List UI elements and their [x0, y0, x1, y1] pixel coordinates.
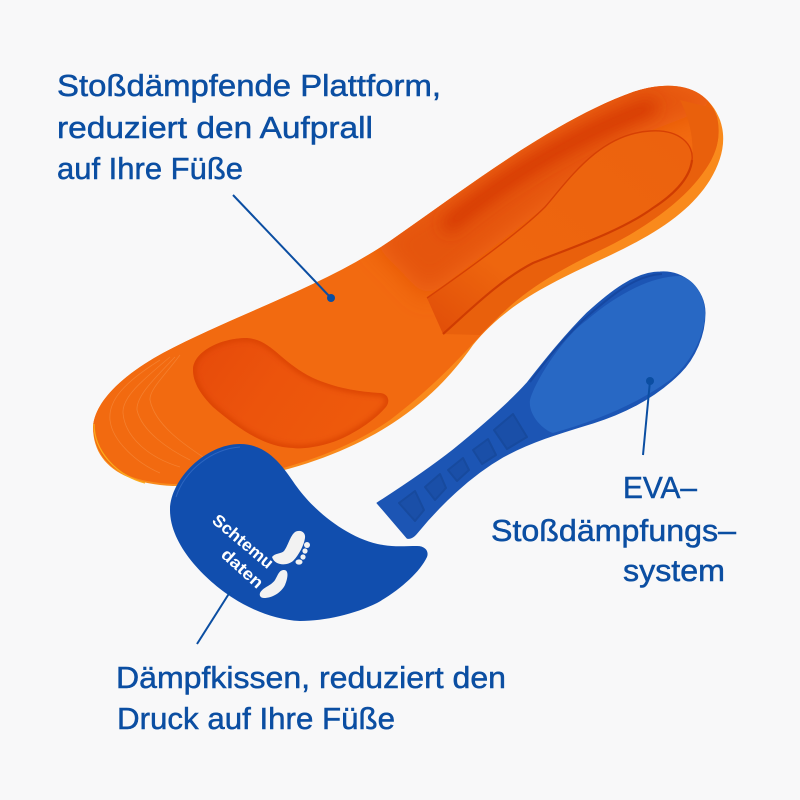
- insole top surface: [93, 86, 719, 484]
- EVA callout: EVA–: [623, 470, 698, 505]
- leader line: cushion: [197, 592, 230, 644]
- infographic canvas: [58, 74, 736, 730]
- cushion label: daten: [217, 545, 267, 592]
- forefoot yellow rim: [94, 424, 145, 483]
- cushion upper rim highlight: [176, 447, 240, 497]
- cushion callout: Druck auf Ihre Füße: [117, 701, 395, 736]
- blue EVA shock absorption piece: [377, 272, 705, 538]
- heading: platform callout: Stoßdämpfende Plattform,: [57, 68, 441, 103]
- cushion callout: Dämpfkissen, reduziert den: [116, 660, 506, 695]
- heading: platform callout: [57, 68, 441, 186]
- leader line: platform: [233, 195, 335, 302]
- arch strip cells: [399, 414, 527, 521]
- blue forefoot cushion: [170, 444, 428, 621]
- heading: platform callout: auf Ihre Füße: [57, 151, 243, 186]
- EVA callout: [491, 470, 737, 588]
- leader line: EVA: [643, 377, 654, 455]
- EVA heel pad: [530, 276, 705, 433]
- EVA base with arch strip: [377, 272, 705, 538]
- icon: footprints: [260, 531, 310, 598]
- cushion callout: [116, 660, 506, 736]
- heel pocket: [427, 131, 692, 334]
- cushion body: [170, 444, 428, 621]
- EVA callout: system: [623, 553, 725, 588]
- forefoot ridge lines: [110, 355, 203, 473]
- cushion label: Schtemu: [208, 511, 277, 573]
- forefoot pocket: [193, 338, 388, 448]
- orange insole: shock-absorbing platform: [93, 86, 724, 486]
- EVA upper rim shadow: [530, 274, 662, 382]
- heading: platform callout: reduziert den Aufprall: [57, 110, 373, 145]
- insole side wall: [93, 86, 723, 486]
- EVA callout: Stoßdämpfungs–: [491, 513, 737, 548]
